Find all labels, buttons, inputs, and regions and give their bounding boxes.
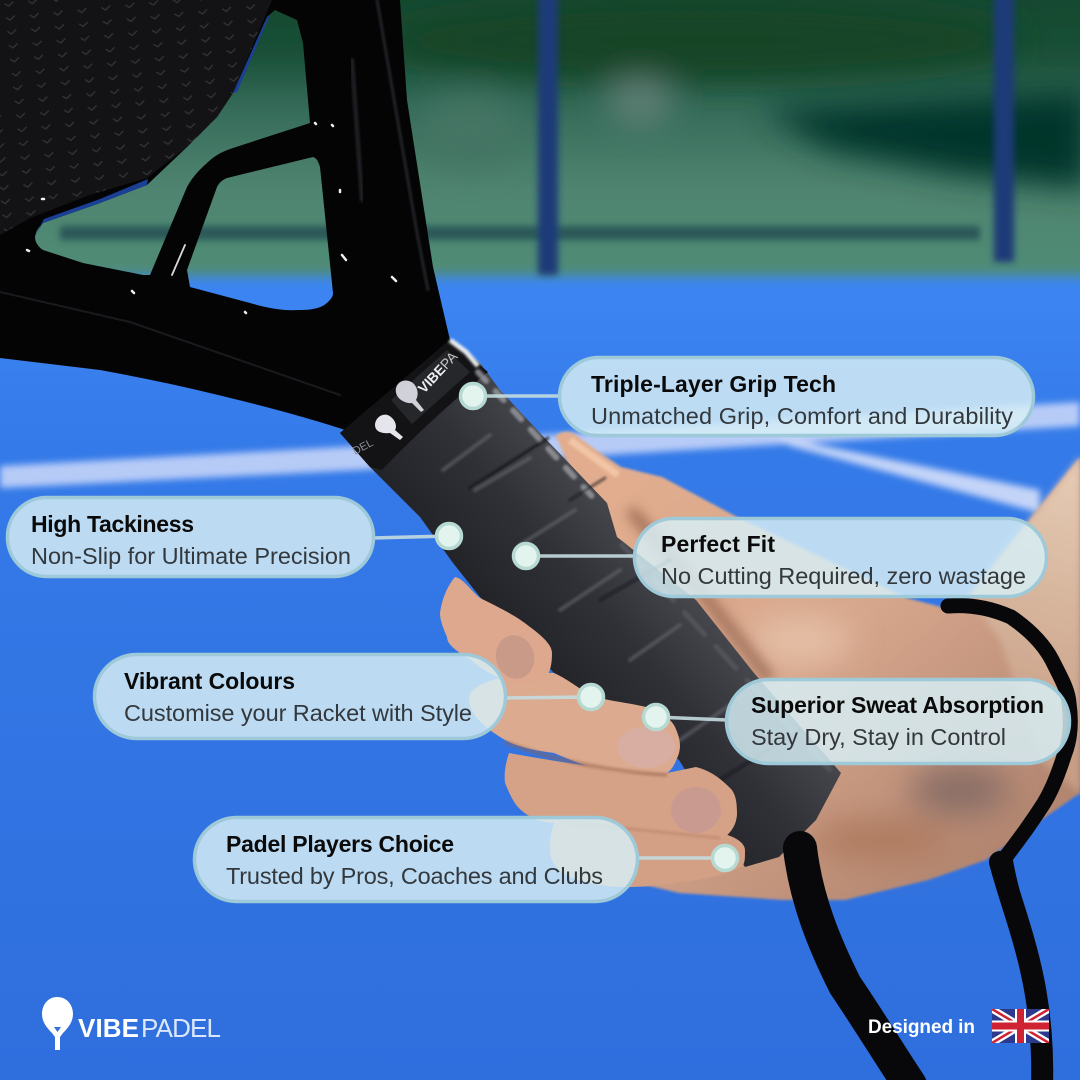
callout: Padel Players Choice (194, 818, 738, 902)
finger: third (505, 753, 737, 840)
carbon racket face (0, 0, 272, 235)
callout: Padel Players Choice: Padel Players Choice (226, 831, 454, 857)
finger nails (491, 631, 539, 683)
photo: fingers wrapped around grip (440, 577, 745, 887)
callout: Vibrant Colours: Vibrant Colours (124, 668, 295, 694)
icon: padel racket (42, 997, 73, 1050)
photo: padel racket (0, 0, 450, 430)
logo: Vibe Padel (42, 997, 221, 1050)
icon: UK flag (992, 1009, 1049, 1043)
callout: Triple-Layer Grip Tech (460, 358, 1034, 436)
logo: Vibe Padel: PADEL (141, 1013, 221, 1043)
callout: Superior Sweat Absorption: Superior Sweat Absorption (751, 692, 1044, 718)
callout: Perfect Fit: Perfect Fit (661, 531, 775, 557)
photo: wrist strap and cord (800, 606, 1070, 1080)
callout: Perfect Fit (514, 518, 1046, 596)
grip collar logos (351, 348, 461, 458)
callout: High Tackiness (8, 498, 462, 576)
callout: Vibrant Colours: Customise your Racket with Style (124, 700, 472, 726)
photo: hand palm, wrist and thumb (556, 432, 1080, 900)
photo: black grip tape handle (340, 340, 841, 867)
callout: Superior Sweat Absorption (644, 680, 1070, 764)
label: Designed in: Designed in (868, 1017, 975, 1038)
callout: Padel Players Choice: Trusted by Pros, Coaches and Clubs (226, 863, 603, 889)
callout: Superior Sweat Absorption: Stay Dry, Stay in Control (751, 724, 1006, 750)
finger: index (440, 577, 552, 683)
grip collar logos: VIBEPA (414, 348, 461, 396)
callout: Triple-Layer Grip Tech: Triple-Layer Grip Tech (591, 371, 836, 397)
logo: Vibe Padel: VIBE (78, 1013, 139, 1043)
finger: fourth (550, 823, 745, 887)
callout: High Tackiness: High Tackiness (31, 511, 194, 537)
finger: second (469, 673, 680, 773)
callout: Perfect Fit: No Cutting Required, zero wastage (661, 563, 1026, 589)
grip collar logos: DEL (351, 437, 375, 458)
callout: Triple-Layer Grip Tech: Unmatched Grip, Comfort and Durability (591, 403, 1013, 429)
callout: High Tackiness: Non-Slip for Ultimate Precision (31, 543, 351, 569)
callout: Vibrant Colours (94, 654, 604, 738)
